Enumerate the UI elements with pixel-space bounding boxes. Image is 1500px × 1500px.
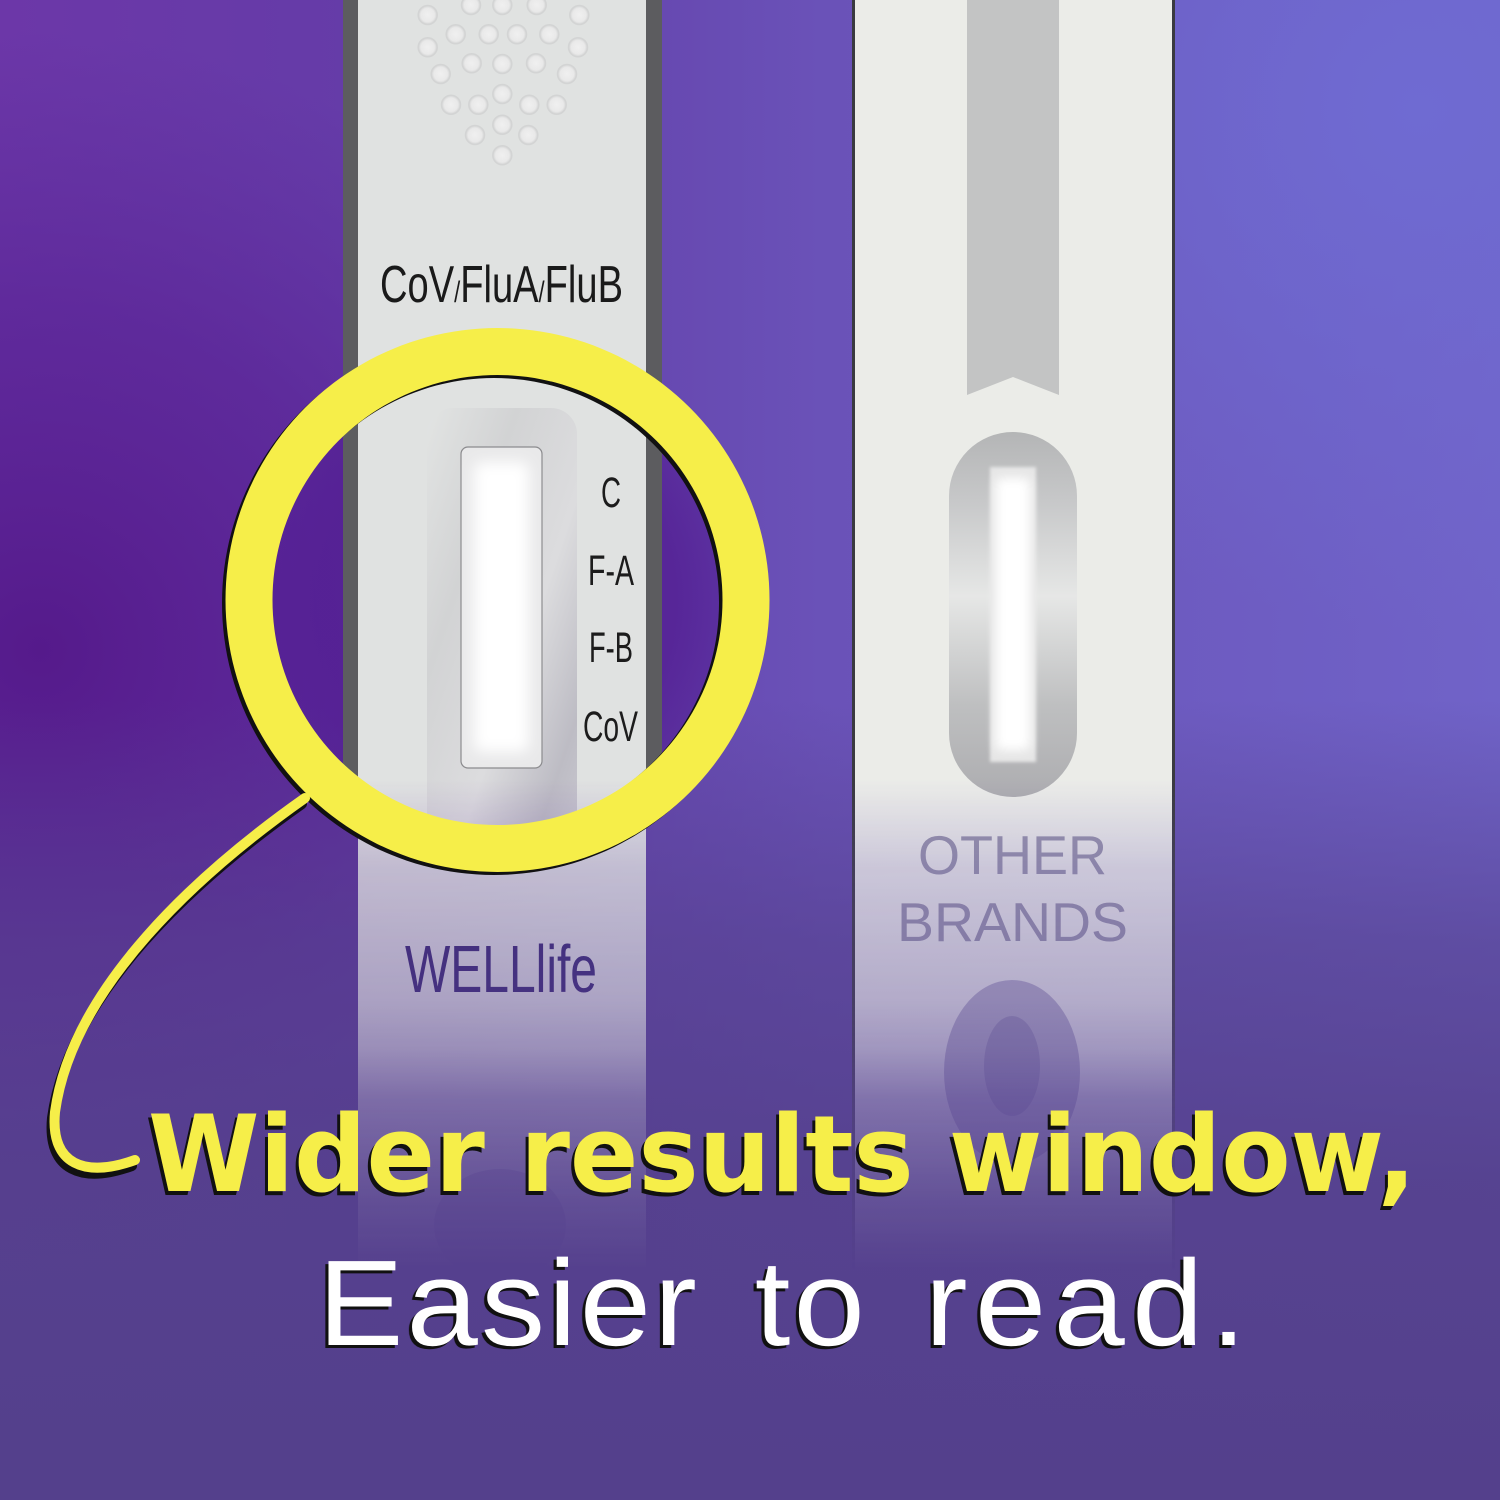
line labels: CoV (583, 703, 638, 751)
faint lower well (434, 1169, 566, 1281)
callout line (52, 798, 305, 1174)
grey arrow band (967, 0, 1059, 395)
brand name: WELLlife (405, 932, 597, 1007)
other brands label: OTHER (918, 824, 1107, 886)
lower oval (944, 980, 1080, 1164)
test strip: other brands (852, 0, 1175, 1270)
subheadline: read. (925, 1235, 1254, 1371)
strip name label: CoV/FluA/FluB (380, 256, 623, 314)
line labels: C (601, 469, 621, 517)
line labels: F-A (588, 547, 634, 595)
test strip: WELLlife (343, 0, 662, 1281)
yellow magnifier ring (222, 328, 770, 875)
headline: Wider results window, (148, 1093, 1416, 1216)
subheadline: Easier (318, 1235, 700, 1371)
line labels (583, 469, 638, 751)
line labels: F-B (589, 624, 633, 672)
subheadline: to (755, 1235, 868, 1371)
sample well dots (418, 0, 589, 165)
other brands label (902, 836, 1126, 942)
results window (461, 447, 542, 768)
other brands label: BRANDS (897, 891, 1128, 953)
narrow results window (949, 432, 1077, 797)
results window housing (427, 408, 577, 850)
